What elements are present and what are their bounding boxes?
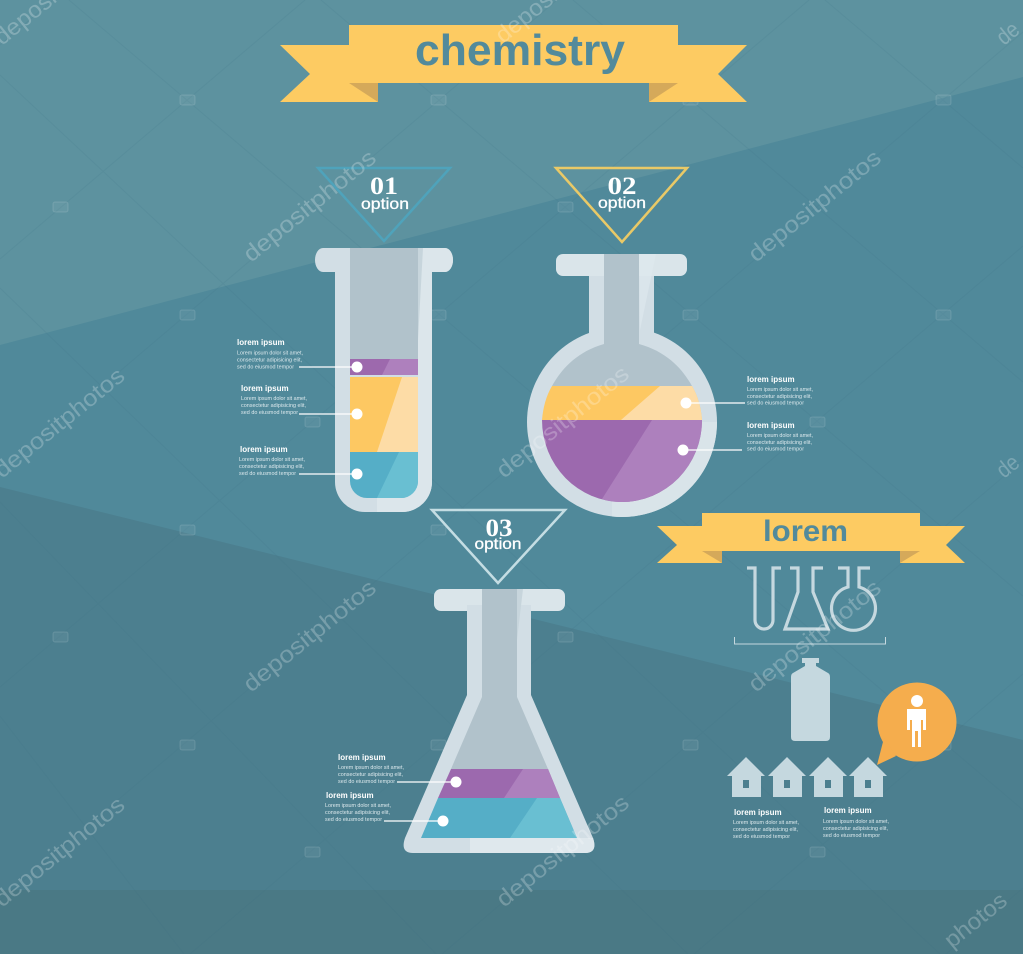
labels: conical flask: sed do eiusmod tempor (325, 817, 382, 823)
title text: chemistry (415, 26, 626, 75)
icon: houses (727, 757, 887, 797)
option 03 triangle (432, 510, 565, 583)
labels: test tube: consectetur adipisicing elit, (241, 403, 306, 409)
labels: conical flask: lorem ipsum (338, 753, 386, 762)
round flask (527, 254, 717, 517)
labels: test tube: Lorem ipsum dolor sit amet, (237, 350, 304, 356)
option 03 triangle: 03 (486, 515, 512, 542)
labels: round flask: Lorem ipsum dolor sit amet, (747, 433, 814, 439)
labels: round flask: lorem ipsum (747, 375, 795, 384)
option 01 triangle: 01 (370, 173, 398, 200)
labels: conical flask: consectetur adipisicing elit, (325, 810, 390, 816)
labels: houses: lorem ipsum (824, 806, 872, 815)
labels: houses: Lorem ipsum dolor sit amet, (823, 819, 890, 825)
labels: conical flask: sed do eiusmod tempor (338, 779, 395, 785)
camera marks (53, 95, 951, 857)
labels: houses: sed do eiusmod tempor (823, 833, 880, 839)
conical flask (404, 589, 594, 853)
labels: conical flask (325, 753, 462, 826)
watermarks: depositphotos (491, 360, 634, 483)
watermarks: photos (939, 887, 1012, 953)
labels: round flask: consectetur adipisicing elit, (747, 440, 812, 446)
labels: round flask (678, 375, 814, 456)
labels: test tube: Lorem ipsum dolor sit amet, (239, 457, 306, 463)
labels: conical flask: Lorem ipsum dolor sit amet, (338, 765, 404, 771)
labels: houses: Lorem ipsum dolor sit amet, (733, 820, 800, 826)
labels: houses: consectetur adipisicing elit, (823, 826, 888, 832)
test tube (315, 248, 453, 512)
labels: test tube: sed do eiusmod tempor (241, 410, 298, 416)
option 01 triangle: option (361, 196, 409, 213)
labels: conical flask: consectetur adipisicing elit, (338, 772, 404, 778)
watermarks: depositphotos (743, 574, 886, 697)
labels: test tube: lorem ipsum (241, 384, 289, 393)
watermarks: depositphotos (491, 789, 634, 912)
watermarks: depositphotos (743, 144, 886, 267)
labels: test tube: lorem ipsum (237, 338, 285, 347)
labels: conical flask: lorem ipsum (326, 791, 374, 800)
labels: houses: sed do eiusmod tempor (733, 834, 790, 840)
icon: glassware outlines (747, 568, 876, 630)
option 02 triangle: 02 (608, 173, 636, 200)
labels: test tube: consectetur adipisicing elit, (239, 464, 304, 470)
labels: test tube: sed do eiusmod tempor (239, 471, 296, 477)
labels: houses: consectetur adipisicing elit, (733, 827, 798, 833)
lorem ribbon (657, 513, 965, 563)
watermarks: depositphotos (238, 574, 381, 697)
option 02 triangle (556, 168, 687, 242)
labels: round flask: sed do eiusmod tempor (747, 446, 804, 452)
icon: bottle (791, 658, 830, 741)
labels: test tube: Lorem ipsum dolor sit amet, (241, 396, 308, 402)
watermarks: depositphotos (238, 144, 381, 267)
labels: round flask: consectetur adipisicing elit, (747, 394, 812, 400)
labels: houses (733, 806, 890, 840)
labels: round flask: sed do eiusmod tempor (747, 400, 804, 406)
title ribbon (280, 25, 747, 102)
lorem text: lorem (763, 515, 848, 548)
option 02 triangle: option (598, 195, 646, 212)
callout: person bubble (877, 682, 956, 765)
labels: test tube: lorem ipsum (240, 445, 288, 454)
labels: test tube (237, 338, 362, 480)
labels: test tube: sed do eiusmod tempor (237, 364, 294, 370)
labels: round flask: lorem ipsum (747, 421, 795, 430)
labels: round flask: Lorem ipsum dolor sit amet, (747, 387, 814, 393)
labels: houses: lorem ipsum (734, 808, 782, 817)
option 01 triangle (318, 168, 450, 241)
labels: conical flask: Lorem ipsum dolor sit amet, (325, 803, 392, 809)
labels: test tube: consectetur adipisicing elit, (237, 358, 302, 364)
bracket (734, 637, 886, 644)
option 03 triangle: option (474, 536, 522, 553)
